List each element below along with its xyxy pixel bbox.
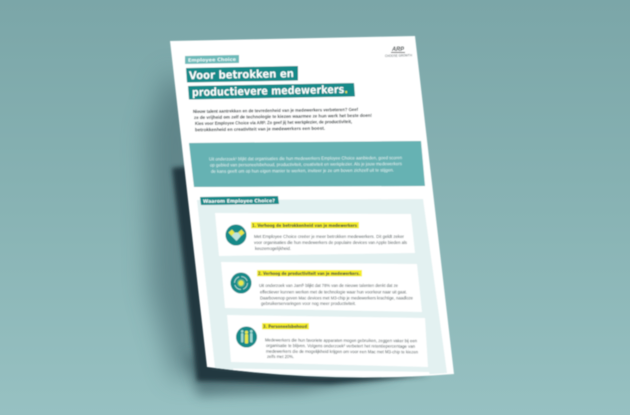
teal callout: Uit onderzoek¹ blijkt dat organisaties die hun medewerkers Employee Choice aanbieden, goed scoren bbox=[209, 155, 402, 161]
card 1 text: Met Employee Choice creëer je meer betrokken medewerkers. Dit geldt zeker bbox=[254, 234, 404, 239]
title: Voor betrokken en bbox=[189, 67, 294, 82]
intro paragraph: ze de vrijheid om zelf de technologie te kiezen waarmee ze hun werk het beste doen! bbox=[194, 113, 372, 120]
card 3 text bbox=[265, 338, 418, 359]
paper shadow bbox=[148, 70, 432, 396]
highlight heading 3 bbox=[262, 323, 309, 330]
heading: Waarom Employee Choice: Waarom Employee Choice? bbox=[203, 198, 275, 205]
card 3 text: medewerkers die de mogelijkheid krijgen om voor een Mac met M3-chip te kiezen bbox=[266, 349, 418, 354]
highlight heading 2: 2. Verhoog de productiviteit van je medewerkers. bbox=[258, 271, 360, 277]
next card peeking at the page edge bbox=[233, 368, 430, 376]
card 1 text: voor organisaties die hun medewerkers de populaire devices van Apple bieden als bbox=[254, 240, 408, 245]
card 3 text: organisatie te blijven. Volgens onderzoek² verbetert het retentiepercentage van bbox=[266, 343, 415, 349]
title: productievere medewerkers. bbox=[192, 83, 348, 99]
highlight heading 2 bbox=[257, 270, 362, 277]
intro paragraph: Nieuw talent aantrekken en de tevredenheid van je medewerkers verbeteren? Geef bbox=[193, 107, 358, 114]
icon: people bbox=[236, 326, 257, 348]
document page bbox=[170, 36, 454, 377]
title bbox=[186, 66, 355, 100]
tag: Employee Choice: Employee Choice bbox=[188, 57, 236, 64]
heading: Waarom Employee Choice bbox=[200, 196, 279, 205]
card 3 bbox=[227, 315, 428, 367]
card 2 text: Daarbovenop geven Mac devices met M3-chip je medewerkers krachtige, naadloze bbox=[260, 296, 413, 300]
highlight heading 1 bbox=[251, 222, 359, 229]
tag: Employee Choice bbox=[185, 55, 239, 64]
card 2 text: gebruikerservaringen voor nog meer productiviteit. bbox=[261, 301, 356, 306]
intro paragraph: Kies voor Employee Choice via ARP. Zo geef jij het werkplezier, de productiviteit, bbox=[195, 119, 352, 126]
card 1 bbox=[215, 213, 415, 256]
highlight heading 3: 3. Personeelsbehoud bbox=[263, 324, 307, 330]
highlight heading 1: 1. Verhoog de betrokkenheid van je medewerkers bbox=[252, 223, 357, 229]
card 1 text: keuzemogelijkheid. bbox=[255, 246, 291, 251]
card 3 text: Medewerkers die hun favoriete apparaten mogen gebruiken, zeggen vaker bij een bbox=[265, 338, 417, 343]
logo: CHOOSE GROWTH bbox=[385, 53, 412, 58]
teal callout: de kans geeft om op hun eigen manier te werken, inviteer je ze om boven zichzelf uit te stijgen. bbox=[211, 168, 394, 174]
intro paragraph bbox=[193, 107, 372, 132]
card 2 text: effectiever kunnen werken met de technologie waar hun voorkeur naar uit gaat. bbox=[260, 289, 407, 294]
card 2 text bbox=[259, 283, 413, 306]
icon: handshake bbox=[226, 224, 246, 246]
icon: productivity bbox=[230, 272, 252, 294]
logo bbox=[385, 46, 412, 58]
logo: ARP bbox=[391, 46, 405, 53]
card 3 text: zelfs met 20%. bbox=[267, 354, 294, 359]
panel: Waarom Employee Choice bbox=[197, 196, 447, 377]
card 2 text: Uit onderzoek van Jamf¹ blijkt dat 78% van de nieuwe talenten denkt dat ze bbox=[259, 283, 398, 288]
teal callout: op gebied van personeelsbehoud, productiviteit, creativiteit en werkplezier. Als je jouw medewerkers bbox=[210, 161, 403, 167]
teal callout bbox=[189, 141, 425, 187]
intro paragraph: betrokkenheid en creativiteit van je medewerkers een boost. bbox=[195, 126, 325, 132]
card 2 bbox=[221, 262, 422, 312]
paper sheet bbox=[170, 36, 454, 377]
card 1 text bbox=[254, 234, 408, 251]
